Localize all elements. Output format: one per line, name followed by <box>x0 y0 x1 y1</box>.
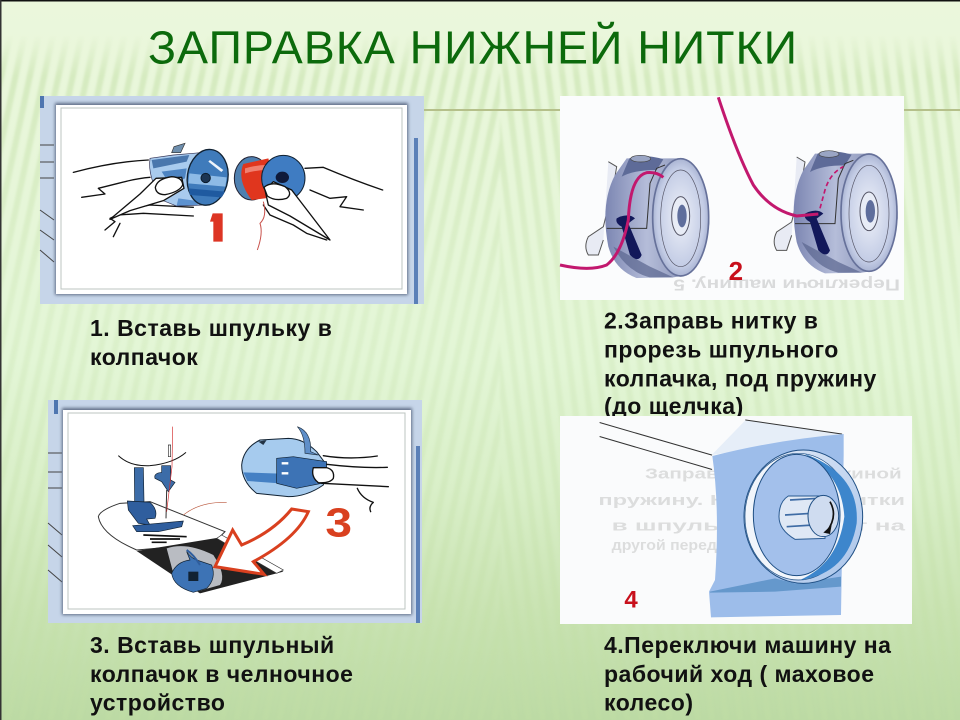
caption 2: (до щелчка) <box>604 393 744 419</box>
caption 2: прорезь шпульного <box>604 336 839 362</box>
number 3: 3 <box>325 499 352 545</box>
illustration: hands with bobbin and case <box>73 143 383 250</box>
illustration: machine foot, case and arrow <box>98 427 388 593</box>
caption 2: 2.Заправь нитку в <box>604 308 818 334</box>
caption 4: рабочий ход ( маховое <box>604 661 874 687</box>
machine body <box>709 434 844 617</box>
large case with finger <box>242 427 327 497</box>
panel 2: thread into slot <box>560 96 904 300</box>
arrow <box>215 509 308 574</box>
caption 2: колпачка, под пружину <box>604 366 877 392</box>
number 2: 2 <box>729 256 743 286</box>
panel 1: insert bobbin into case <box>40 96 424 304</box>
panel 4: handwheel: в шпульное нажмет на <box>612 519 907 535</box>
caption 3: 3. Вставь шпульный <box>90 632 335 658</box>
thread left <box>560 173 663 268</box>
handwheel <box>744 450 863 583</box>
bobbin case left <box>586 155 709 278</box>
title: ЗАПРАВКА НИЖНЕЙ НИТКИ <box>148 22 797 74</box>
small case in shuttle <box>172 550 213 592</box>
number 4: 4 <box>624 586 638 613</box>
caption 1: 1. Вставь шпульку в <box>90 315 332 341</box>
panel 4: handwheel <box>560 416 912 624</box>
caption 4: колесо) <box>604 690 693 716</box>
panel 4: handwheel: пружину. Натягивай нитки <box>598 493 905 509</box>
number 1 <box>210 213 223 242</box>
panel 4: handwheel: другой передней <box>612 538 745 554</box>
caption 4: 4.Переключи машину на <box>604 632 891 658</box>
panel 4: handwheel: Заправь нитку пружиной <box>645 466 902 482</box>
caption 3: устройство <box>90 690 225 716</box>
thread right <box>718 97 818 216</box>
panel 3: insert case into shuttle <box>48 400 422 623</box>
panel 2: thread into slot: Переключи машину. 5 <box>673 275 900 292</box>
bobbin case right <box>774 151 898 273</box>
caption 3: колпачок в челночное <box>90 661 353 687</box>
caption 1: колпачок <box>90 344 198 370</box>
